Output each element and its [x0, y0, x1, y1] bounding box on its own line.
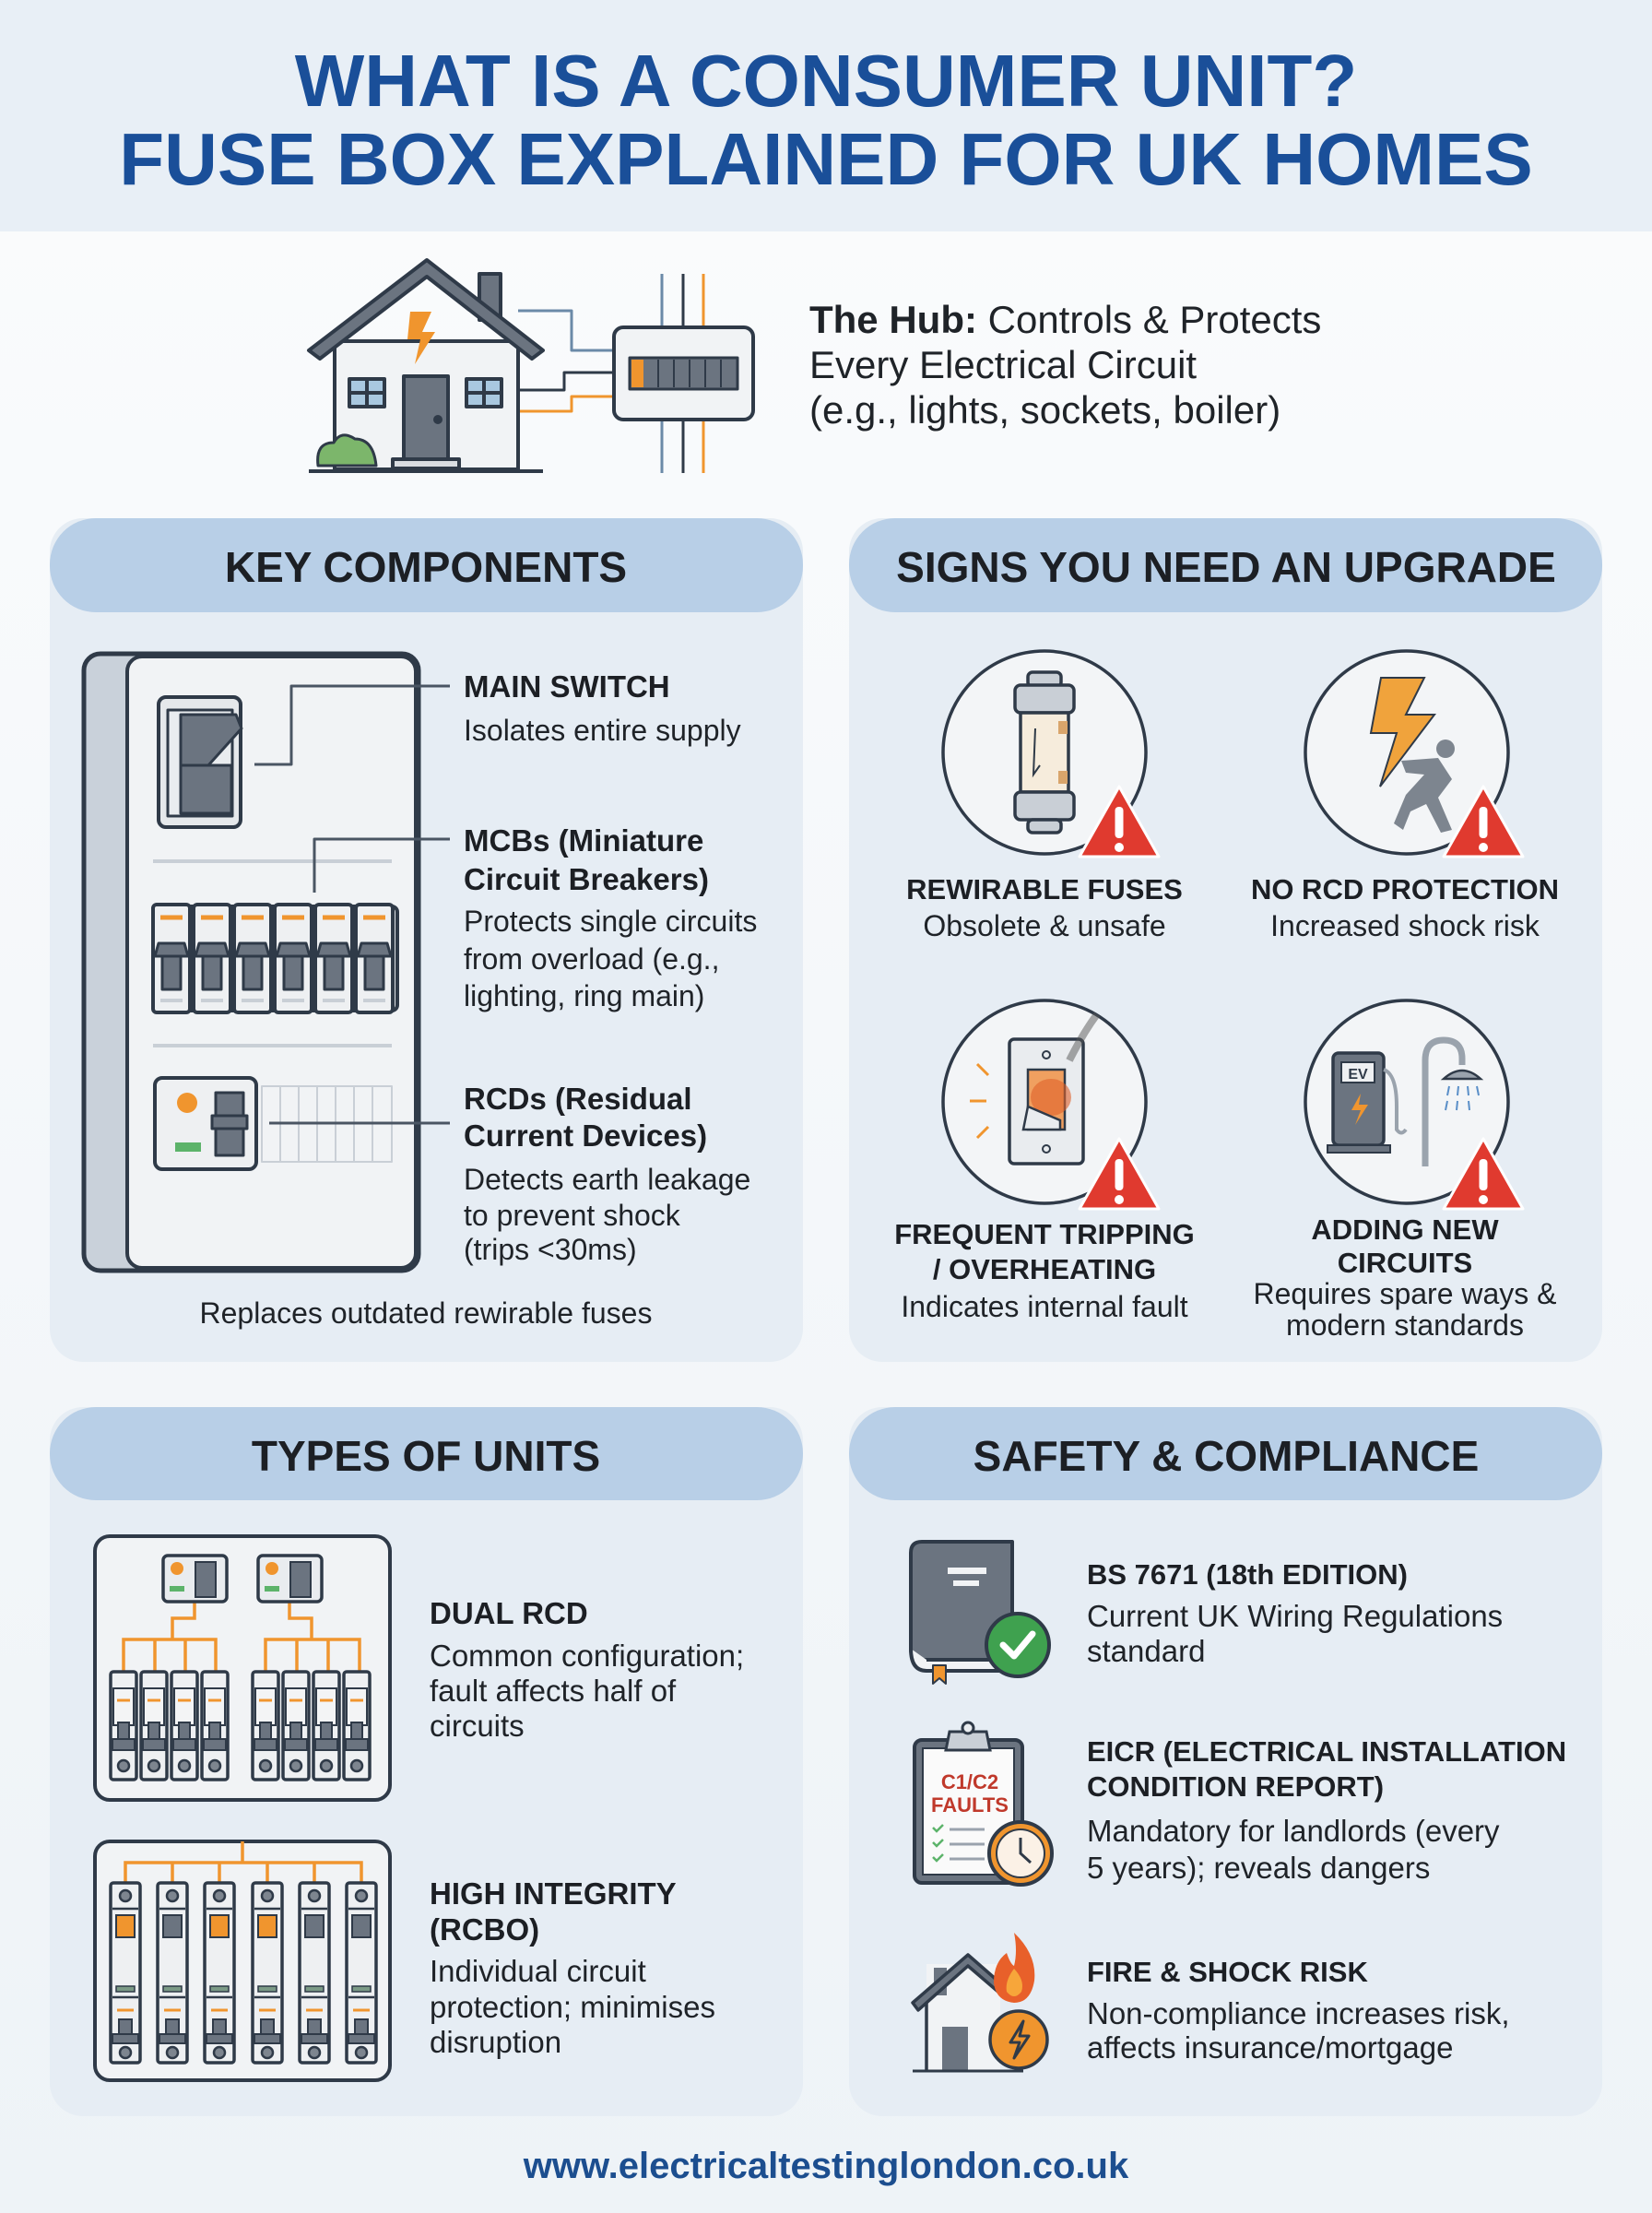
diagram: dual RCD: [95, 1536, 390, 1800]
text: MCBs: from overload (e.g.,: [464, 942, 719, 976]
text: no RCD protection: NO RCD PROTECTION: [1251, 873, 1559, 905]
text: rewirable fuses: REWIRABLE FUSES: [906, 873, 1183, 905]
text: RCBO: protection; minimises: [430, 1990, 715, 2024]
text: EICR: 5 years); reveals dangers: [1087, 1851, 1430, 1885]
text: BS 7671: standard: [1087, 1634, 1205, 1668]
heading: safety: SAFETY & COMPLIANCE: [974, 1432, 1479, 1480]
text: EICR: EICR (ELECTRICAL INSTALLATION: [1087, 1735, 1566, 1768]
text: EICR: CONDITION REPORT): [1087, 1770, 1384, 1803]
panel: signs you need an upgrade: [849, 518, 1602, 1362]
text: dual RCD: DUAL RCD: [430, 1596, 588, 1630]
text: MCBs: lighting, ring main): [464, 979, 704, 1012]
text: adding new circuits: Requires spare ways &: [1253, 1277, 1557, 1310]
title: WHAT IS A CONSUMER UNIT?: [295, 40, 1357, 122]
text: no RCD protection: Increased shock risk: [1270, 909, 1540, 942]
heading: signs: [849, 518, 1602, 612]
heading: signs: SIGNS YOU NEED AN UPGRADE: [896, 543, 1556, 591]
heading: key components: [50, 518, 803, 612]
text: BS 7671: Current UK Wiring Regulations: [1087, 1599, 1503, 1633]
text: main switch: MAIN SWITCH: [464, 669, 670, 704]
icon: shock: [1305, 651, 1508, 854]
text: dual RCD: circuits: [430, 1709, 525, 1743]
text: MCBs: Circuit Breakers): [464, 862, 709, 896]
icon: fire and shock risk: [913, 1933, 1047, 2071]
hub description: (e.g., lights, sockets, boiler): [809, 388, 1280, 432]
icon: house connected to consumer unit: [309, 260, 753, 473]
text: RCDs: RCDs (Residual: [464, 1082, 692, 1116]
diagram: RCBO unit: [95, 1841, 390, 2080]
hub description: The Hub: Controls & Protects: [809, 298, 1321, 341]
footnote: Replaces outdated rewirable fuses: [200, 1296, 652, 1330]
title: [119, 40, 1533, 200]
text: no RCD protection: [1251, 873, 1559, 942]
text: BS 7671: [1087, 1558, 1503, 1668]
icon: tripping switch: [943, 1000, 1146, 1203]
panel: types of units: [50, 1407, 803, 2116]
text: rewirable fuses: Obsolete & unsafe: [923, 909, 1166, 942]
text: RCDs: to prevent shock: [464, 1199, 681, 1232]
text: adding new circuits: [1253, 1213, 1557, 1342]
icon: EV charger and shower: EV: [1348, 1067, 1368, 1083]
text: adding new circuits: CIRCUITS: [1338, 1247, 1472, 1279]
text: frequent tripping: Indicates internal fault: [901, 1290, 1188, 1323]
text: RCBO: (RCBO): [430, 1912, 539, 1947]
hub description: Every Electrical Circuit: [809, 343, 1197, 386]
icon: EICR clipboard: C1/C2: [941, 1770, 998, 1793]
text: RCDs: (trips <30ms): [464, 1233, 637, 1266]
text: RCDs: Detects earth leakage: [464, 1163, 750, 1196]
text: MCBs: [464, 823, 757, 1012]
text: MCBs: MCBs (Miniature: [464, 823, 703, 858]
text: RCBO: [430, 1876, 715, 2059]
hub description: [809, 298, 1321, 432]
title: FUSE BOX EXPLAINED FOR UK HOMES: [119, 118, 1533, 200]
text: frequent tripping: / OVERHEATING: [933, 1253, 1156, 1285]
text: fire & shock: FIRE & SHOCK RISK: [1087, 1956, 1368, 1988]
heading: safety: [849, 1407, 1602, 1500]
text: fire & shock: affects insurance/mortgage: [1087, 2030, 1453, 2065]
text: fire & shock: [1087, 1956, 1510, 2065]
heading: types: [50, 1407, 803, 1500]
diagram: consumer unit: [84, 654, 450, 1271]
text: BS 7671: BS 7671 (18th EDITION): [1087, 1558, 1408, 1591]
text: RCBO: disruption: [430, 2025, 561, 2059]
text: RCBO: Individual circuit: [430, 1954, 646, 1988]
heading: key components: KEY COMPONENTS: [225, 543, 627, 591]
text: EICR: Mandatory for landlords (every: [1087, 1814, 1500, 1848]
icon: EV charger and shower: [1305, 1000, 1508, 1203]
text: main switch: [464, 669, 741, 747]
header band: [0, 0, 1652, 231]
icon: rewirable fuse: [943, 651, 1146, 854]
text: dual RCD: Common configuration;: [430, 1639, 744, 1673]
text: frequent tripping: [894, 1218, 1195, 1323]
text: adding new circuits: ADDING NEW: [1311, 1213, 1499, 1246]
text: dual RCD: [430, 1596, 744, 1743]
panel: key components: [50, 518, 803, 1362]
text: RCDs: [464, 1082, 750, 1266]
text: rewirable fuses: [906, 873, 1183, 942]
icon: EICR clipboard: FAULTS: [931, 1793, 1009, 1817]
text: adding new circuits: modern standards: [1286, 1308, 1524, 1342]
footer url: www.electricaltestinglondon.co.uk: [523, 2146, 1129, 2186]
icon: EICR clipboard: [914, 1722, 1052, 1885]
text: RCDs: Current Devices): [464, 1118, 707, 1153]
icon: regulations book: [911, 1542, 1049, 1684]
text: fire & shock: Non-compliance increases risk,: [1087, 1996, 1510, 2030]
panel: safety & compliance: [849, 1407, 1602, 2116]
text: dual RCD: fault affects half of: [430, 1674, 677, 1708]
text: main switch: Isolates entire supply: [464, 714, 741, 747]
text: RCBO: HIGH INTEGRITY: [430, 1876, 677, 1911]
text: frequent tripping: FREQUENT TRIPPING: [894, 1218, 1195, 1250]
text: EICR: [1087, 1735, 1566, 1885]
heading: types: TYPES OF UNITS: [252, 1432, 600, 1480]
text: MCBs: Protects single circuits: [464, 905, 757, 938]
